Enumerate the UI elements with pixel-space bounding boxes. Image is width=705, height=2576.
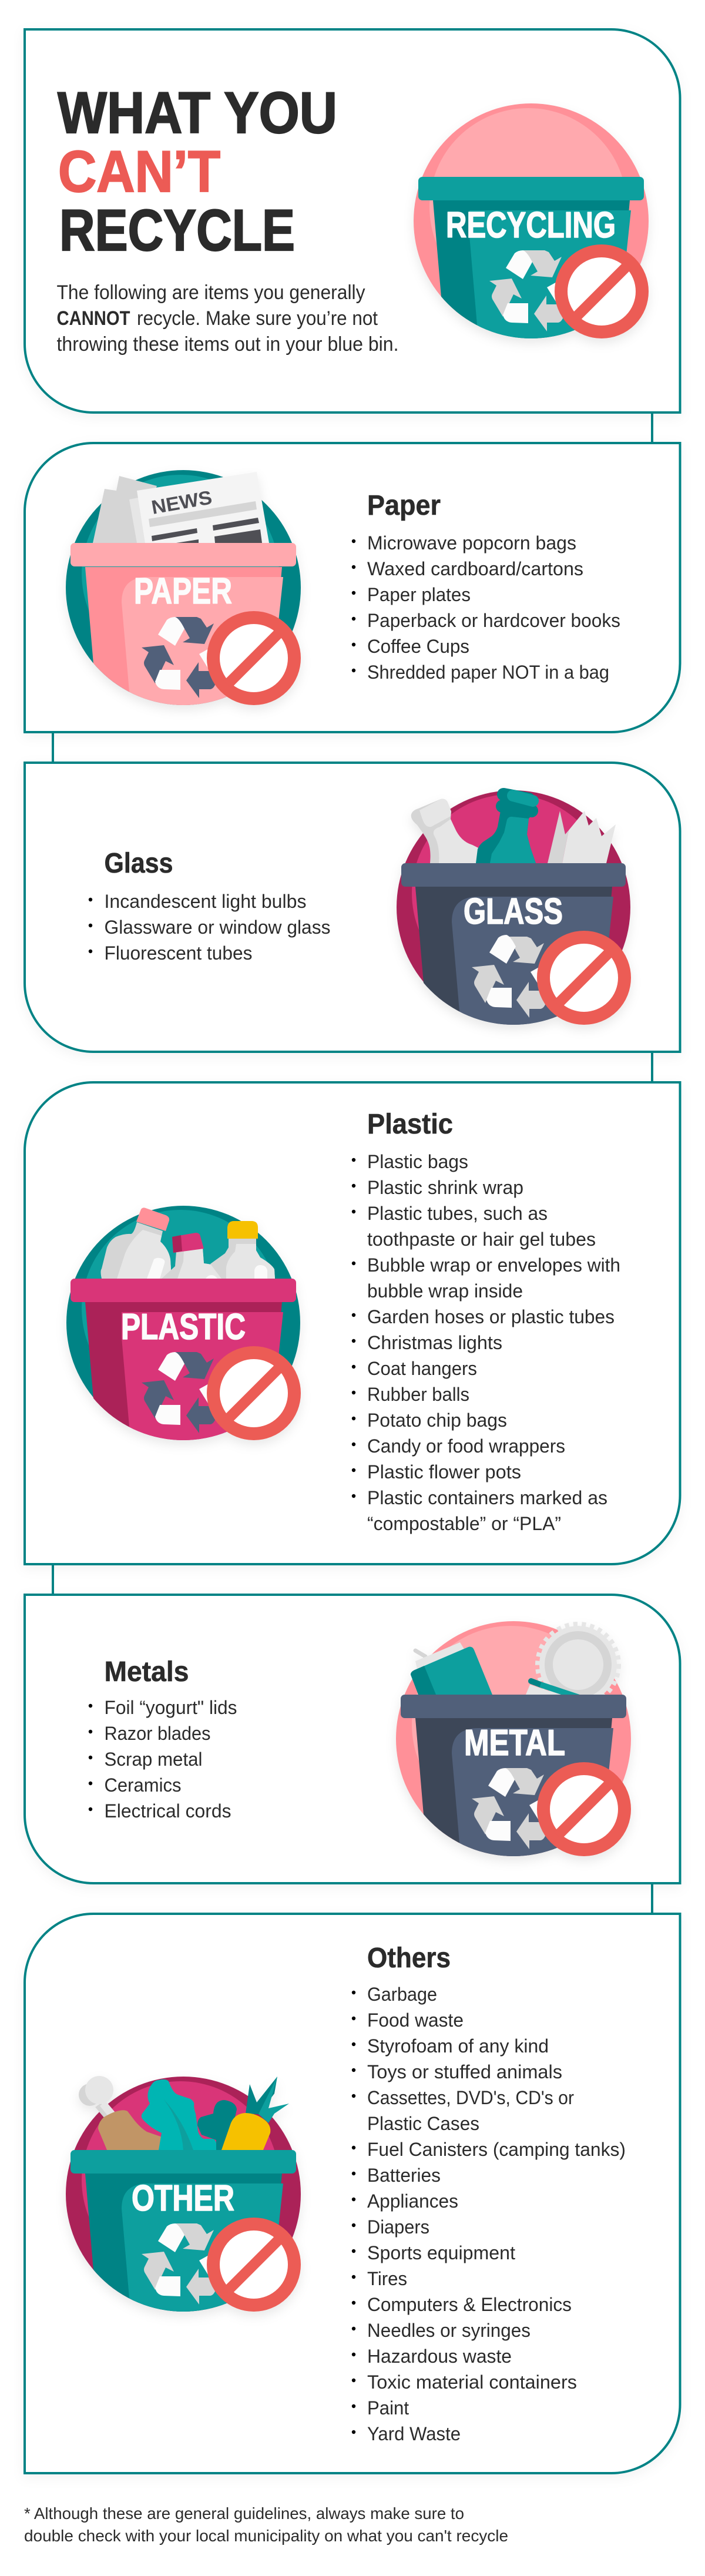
title: RECYCLE [59, 197, 295, 263]
list: others: Garbage [367, 1984, 437, 2005]
list: metals: Foil “yogurt" lids [105, 1697, 237, 1718]
panel frame [25, 1914, 680, 2473]
footnote: double check with your local municipality on what you can't recycle [24, 2527, 508, 2545]
panel: intro [25, 29, 680, 412]
panel: metals [25, 1595, 680, 1883]
bottles and shards [411, 794, 616, 863]
newspapers: NEWS [150, 486, 214, 518]
list: others: Needles or syringes [367, 2320, 531, 2341]
list: plastic: “compostable” or “PLA” [367, 1513, 561, 1534]
heading: others: Others [367, 1943, 451, 1974]
list: metals [89, 1697, 237, 1822]
newspapers [93, 472, 269, 543]
list: paper [352, 532, 620, 683]
list: plastic: Bubble wrap or envelopes with [367, 1255, 620, 1276]
list: others: Appliances [367, 2191, 458, 2212]
panel frame [25, 1595, 680, 1883]
list: plastic: Christmas lights [367, 1332, 502, 1353]
list: plastic: bubble wrap inside [367, 1280, 523, 1302]
icon: other bin [66, 2076, 301, 2312]
connector: glass to plastic [651, 1051, 653, 1084]
connector: plastic to metals [52, 1563, 54, 1596]
list: plastic: Plastic shrink wrap [367, 1177, 523, 1198]
connector: paper to glass [52, 731, 54, 764]
icon: paper bin [66, 470, 301, 705]
list: glass: Fluorescent tubes [105, 942, 253, 964]
heading: metals: Metals [105, 1656, 189, 1688]
list: others: Yard Waste [367, 2423, 461, 2444]
list: others: Computers & Electronics [367, 2294, 572, 2315]
panel: plastic [25, 1082, 680, 1564]
list: plastic: Garden hoses or plastic tubes [367, 1306, 615, 1327]
panel frame [25, 443, 680, 732]
list: plastic: toothpaste or hair gel tubes [367, 1229, 596, 1250]
list: plastic: Plastic bags [367, 1151, 468, 1172]
list: others: Tires [367, 2268, 407, 2289]
list: others: Toxic material containers [367, 2372, 577, 2393]
list: plastic: Plastic containers marked as [367, 1487, 607, 1508]
intro text [56, 281, 398, 355]
list: others: Sports equipment [367, 2242, 515, 2263]
list: others: Fuel Canisters (camping tanks) [367, 2139, 626, 2160]
title [58, 80, 337, 263]
list: others: Toys or stuffed animals [367, 2061, 562, 2082]
list: others: Styrofoam of any kind [367, 2035, 549, 2057]
list: glass: Glassware or window glass [105, 917, 330, 938]
list: others [352, 1984, 626, 2444]
icon: recycling bin: RECYCLING [446, 205, 616, 246]
icon: plastic bin: PLASTIC [121, 1307, 246, 1347]
intro text: The following are items you generally [56, 281, 365, 304]
list: paper: Shredded paper NOT in a bag [367, 662, 609, 683]
list: others: Batteries [367, 2165, 441, 2186]
list: plastic: Candy or food wrappers [367, 1435, 565, 1457]
icon: glass bin [397, 790, 630, 1025]
list: paper: Paper plates [367, 584, 471, 605]
list: metals: Ceramics [105, 1775, 181, 1796]
panel: glass [25, 763, 680, 1052]
list: plastic: Coat hangers [367, 1358, 477, 1379]
title: CAN’T [58, 139, 220, 204]
list: paper: Waxed cardboard/cartons [367, 558, 583, 579]
list: others: Food waste [367, 2010, 464, 2031]
title: WHAT YOU [58, 80, 337, 145]
list: plastic [352, 1151, 620, 1534]
list: plastic: Plastic tubes, such as [367, 1203, 548, 1224]
list: paper: Coffee Cups [367, 636, 469, 657]
icon: metal bin [396, 1621, 631, 1856]
cans and bottle cap [411, 1624, 619, 1705]
panel: paper [25, 443, 680, 732]
intro text: CANNOT [56, 307, 130, 330]
list: plastic: Potato chip bags [367, 1410, 507, 1431]
panel frame [25, 29, 680, 412]
list: glass [89, 891, 331, 964]
intro text: recycle. Make sure you’re not [137, 307, 378, 330]
heading: glass: Glass [105, 848, 173, 879]
list: plastic: Rubber balls [367, 1384, 469, 1405]
panel frame [25, 763, 680, 1052]
list: metals: Razor blades [105, 1723, 210, 1744]
heading: paper: Paper [367, 490, 441, 521]
list: others: Hazardous waste [367, 2346, 512, 2367]
plastic bottles [101, 1208, 275, 1279]
list: paper: Microwave popcorn bags [367, 532, 576, 554]
panel: others [25, 1914, 680, 2473]
list: plastic: Plastic flower pots [367, 1461, 521, 1482]
list: metals: Electrical cords [105, 1800, 231, 1822]
list: paper: Paperback or hardcover books [367, 610, 620, 631]
list: others: Plastic Cases [367, 2113, 479, 2134]
intro text: throwing these items out in your blue bin. [56, 333, 398, 355]
icon: recycling bin [414, 103, 649, 338]
list: metals: Scrap metal [105, 1749, 202, 1770]
list: others: Paint [367, 2397, 409, 2419]
connector: intro to paper [651, 411, 653, 444]
list: others: Cassettes, DVD's, CD's or [367, 2087, 574, 2108]
icon: metal bin: METAL [464, 1723, 565, 1763]
list: others: Diapers [367, 2216, 429, 2238]
connector: metals to others [651, 1882, 653, 1915]
icon: plastic bin [66, 1206, 300, 1440]
icon: other bin: OTHER [132, 2178, 234, 2219]
heading: plastic: Plastic [367, 1109, 453, 1140]
icon: paper bin: PAPER [134, 571, 232, 612]
list: glass: Incandescent light bulbs [105, 891, 307, 912]
footnote: * Although these are general guidelines, always make sure to [24, 2504, 464, 2523]
panel frame [25, 1082, 680, 1564]
icon: glass bin: GLASS [464, 891, 563, 932]
food waste [79, 2076, 289, 2150]
footnote [24, 2504, 508, 2545]
